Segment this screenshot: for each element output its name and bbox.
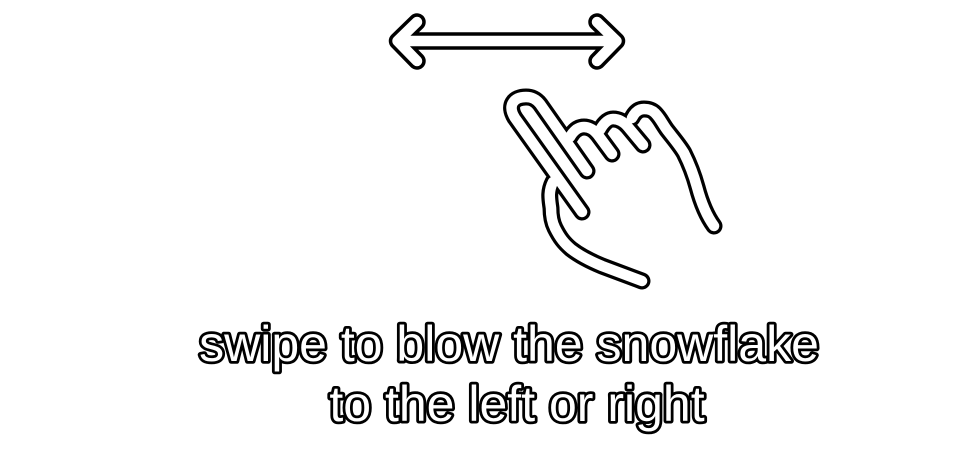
caption text [199,316,819,432]
caption text: swipe to blow the snowflake [199,316,819,372]
caption text: to the left or right [329,376,705,432]
icon: swiping hand [512,97,714,281]
icon: double-headed horizontal arrow [398,22,616,61]
